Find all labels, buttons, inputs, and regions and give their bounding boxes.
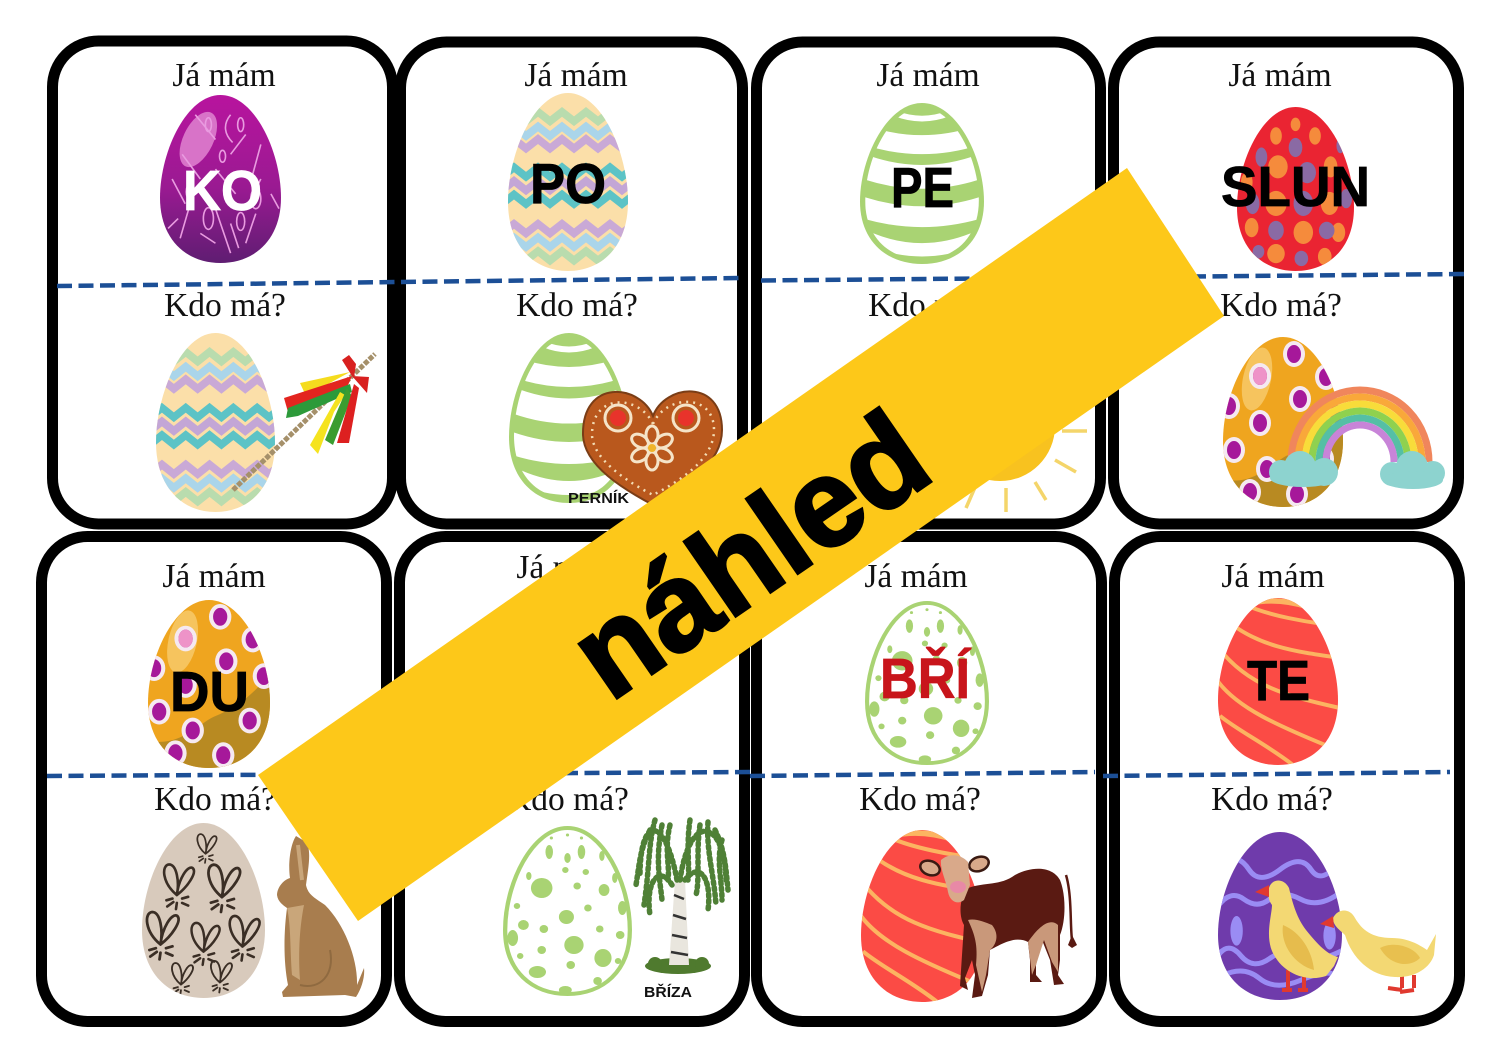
icon: calf bbox=[918, 854, 1077, 998]
heading: Kdo má?: Kdo má? bbox=[164, 287, 286, 324]
cut line: top row, left bbox=[57, 278, 740, 286]
heading: Kdo má?: Kdo má? bbox=[516, 287, 638, 324]
egg: red dotted bbox=[1237, 107, 1354, 271]
card: KO bbox=[52, 41, 392, 524]
preview banner bbox=[258, 168, 1224, 921]
card frame bbox=[1114, 42, 1458, 524]
card: BŘÍ bbox=[756, 536, 1102, 1022]
egg: beige with bunnies bbox=[142, 823, 265, 998]
cut line: bottom row, middle bbox=[750, 772, 1095, 776]
icon: gingerbread heart bbox=[583, 391, 722, 505]
heading: Kdo má?: Kdo má? bbox=[1220, 287, 1342, 324]
egg: pastel zigzag bbox=[502, 93, 634, 271]
egg: pastel zigzag bbox=[150, 333, 281, 512]
egg: green stripes bbox=[856, 103, 988, 264]
card frame bbox=[1114, 536, 1460, 1022]
heading: Já mám: Já mám bbox=[876, 57, 980, 94]
card frame bbox=[400, 42, 742, 524]
egg: green dots bbox=[505, 828, 630, 994]
heading: Já mám: Já mám bbox=[172, 57, 276, 94]
heading: Já mám: Já mám bbox=[864, 558, 968, 595]
syllable: DU: DU bbox=[170, 660, 249, 724]
egg: red striped bbox=[1218, 598, 1340, 765]
icon: duck right bbox=[1320, 910, 1436, 992]
label: PERNÍK: PERNÍK bbox=[568, 490, 629, 507]
card frame bbox=[400, 536, 744, 1022]
egg: green dots bbox=[867, 603, 987, 763]
heading: Kdo má?: Kdo má? bbox=[1211, 781, 1333, 818]
egg: red striped bbox=[861, 830, 985, 1002]
syllable: KO: KO bbox=[183, 159, 262, 223]
syllable: PO: PO bbox=[530, 152, 606, 216]
heading: Já mám: Já mám bbox=[162, 558, 266, 595]
syllable: PE: PE bbox=[891, 156, 954, 220]
card: PO bbox=[400, 42, 742, 524]
card: SLUN bbox=[1114, 42, 1458, 524]
heading: Já mám: Já mám bbox=[1228, 57, 1332, 94]
egg: purple leaves bbox=[160, 95, 281, 263]
card: TE bbox=[1114, 536, 1460, 1022]
icon: hare bbox=[277, 836, 364, 997]
heading: Kdo má?: Kdo má? bbox=[507, 781, 629, 818]
heading: Kdo má?: Kdo má? bbox=[154, 781, 276, 818]
icon: sun bbox=[945, 371, 1087, 512]
egg: purple waves bbox=[1218, 832, 1342, 1000]
heading: Kdo má?: Kdo má? bbox=[868, 287, 990, 324]
card: DU bbox=[42, 536, 386, 1022]
cut line: bottom row, right bbox=[1103, 772, 1450, 776]
syllable: TE: TE bbox=[1247, 649, 1310, 713]
syllable: SLUN: SLUN bbox=[1221, 155, 1370, 219]
heading: Kdo má?: Kdo má? bbox=[859, 781, 981, 818]
heading: Já mám: Já mám bbox=[1221, 558, 1325, 595]
heading: Já mám: Já mám bbox=[516, 549, 620, 586]
egg: green stripes bbox=[505, 333, 633, 503]
card frame bbox=[52, 41, 392, 524]
cut line: bottom row, left bbox=[47, 772, 750, 776]
cut line: top row, right bbox=[761, 274, 1465, 280]
syllable: BŘÍ: BŘÍ bbox=[880, 646, 972, 711]
icon: pomlazka whip with ribbons bbox=[233, 354, 375, 490]
card frame bbox=[756, 42, 1100, 524]
card: birch (syllable hidden by banner) bbox=[400, 536, 744, 1022]
card frame bbox=[42, 536, 386, 1022]
icon: birch tree bbox=[636, 820, 728, 974]
icon: rainbow with clouds bbox=[1269, 390, 1445, 489]
egg: gold dotted bbox=[143, 600, 275, 768]
label: BŘÍZA: BŘÍZA bbox=[644, 983, 692, 1001]
card: PE bbox=[756, 42, 1100, 524]
egg: gold dotted bbox=[1218, 337, 1348, 507]
card frame bbox=[756, 536, 1102, 1022]
banner text: náhled: náhled bbox=[546, 385, 953, 725]
heading: Já mám: Já mám bbox=[524, 57, 628, 94]
icon: duck left bbox=[1255, 880, 1338, 990]
